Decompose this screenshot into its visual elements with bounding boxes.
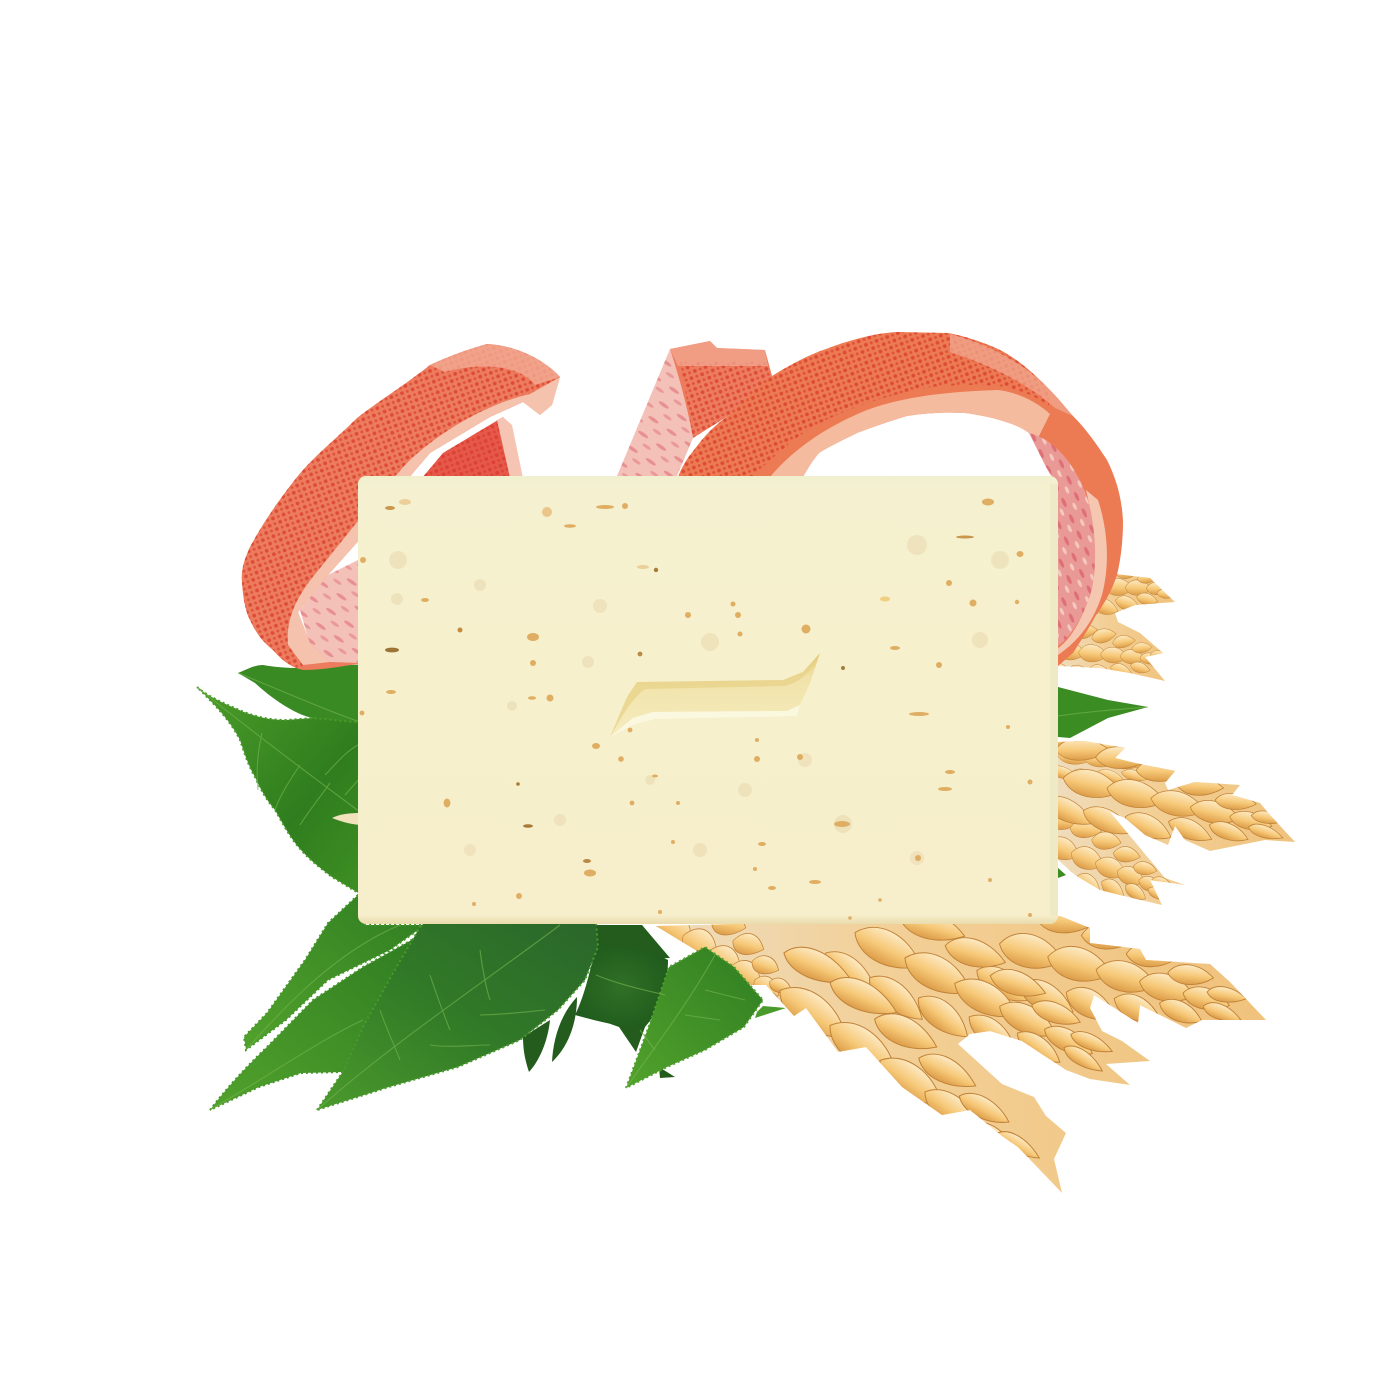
left peel top highlight (430, 344, 560, 385)
left peel inner flesh (422, 417, 522, 478)
leaf: large bottom (317, 922, 598, 1110)
leaf: back left upper (238, 664, 365, 724)
peel: right (678, 332, 1123, 666)
middle peel pink inside (617, 349, 693, 476)
soap soft blotches (389, 535, 1009, 865)
leaf: right (1058, 687, 1148, 738)
right peel pores (678, 332, 1049, 477)
left peel skin band (242, 344, 560, 670)
soap right edge shade (1050, 484, 1058, 916)
leaf: large left (197, 687, 365, 897)
leaf: lower left back (244, 895, 425, 1050)
left peel pith rim (288, 377, 560, 665)
right peel band (678, 332, 1123, 666)
leaf: bottom right (626, 947, 763, 1088)
tea leaves (197, 664, 1148, 1110)
middle peel skin (670, 341, 772, 438)
right peel pith (770, 390, 1050, 477)
leaf: lower left front (210, 937, 417, 1110)
leaf: dark back leaves (523, 925, 675, 1078)
grapefruit peels (242, 332, 1123, 670)
right peel pink inside (1029, 433, 1095, 646)
middle peel top highlight (670, 341, 768, 366)
right peel pale strip (1058, 490, 1107, 655)
right peel top highlight (950, 334, 1073, 416)
soap body (358, 476, 1058, 924)
soap specks (360, 498, 1033, 920)
small leaf sliver right (1058, 868, 1066, 878)
wheat stalk over left leaf (332, 813, 360, 825)
peel: middle (617, 341, 772, 476)
left peel pink inside (300, 558, 362, 665)
soap logo indentation (610, 653, 820, 737)
leaf veins (197, 673, 1148, 1110)
product illustration (196, 332, 1295, 1193)
leaf: dark right of large (575, 947, 668, 1027)
soap bar (358, 476, 1058, 924)
peel: left (242, 344, 560, 670)
wheat ears (656, 574, 1295, 1193)
wheat silhouettes (656, 574, 1295, 1193)
leaf stalk (755, 1006, 786, 1018)
wheat grains (619, 550, 1296, 1219)
